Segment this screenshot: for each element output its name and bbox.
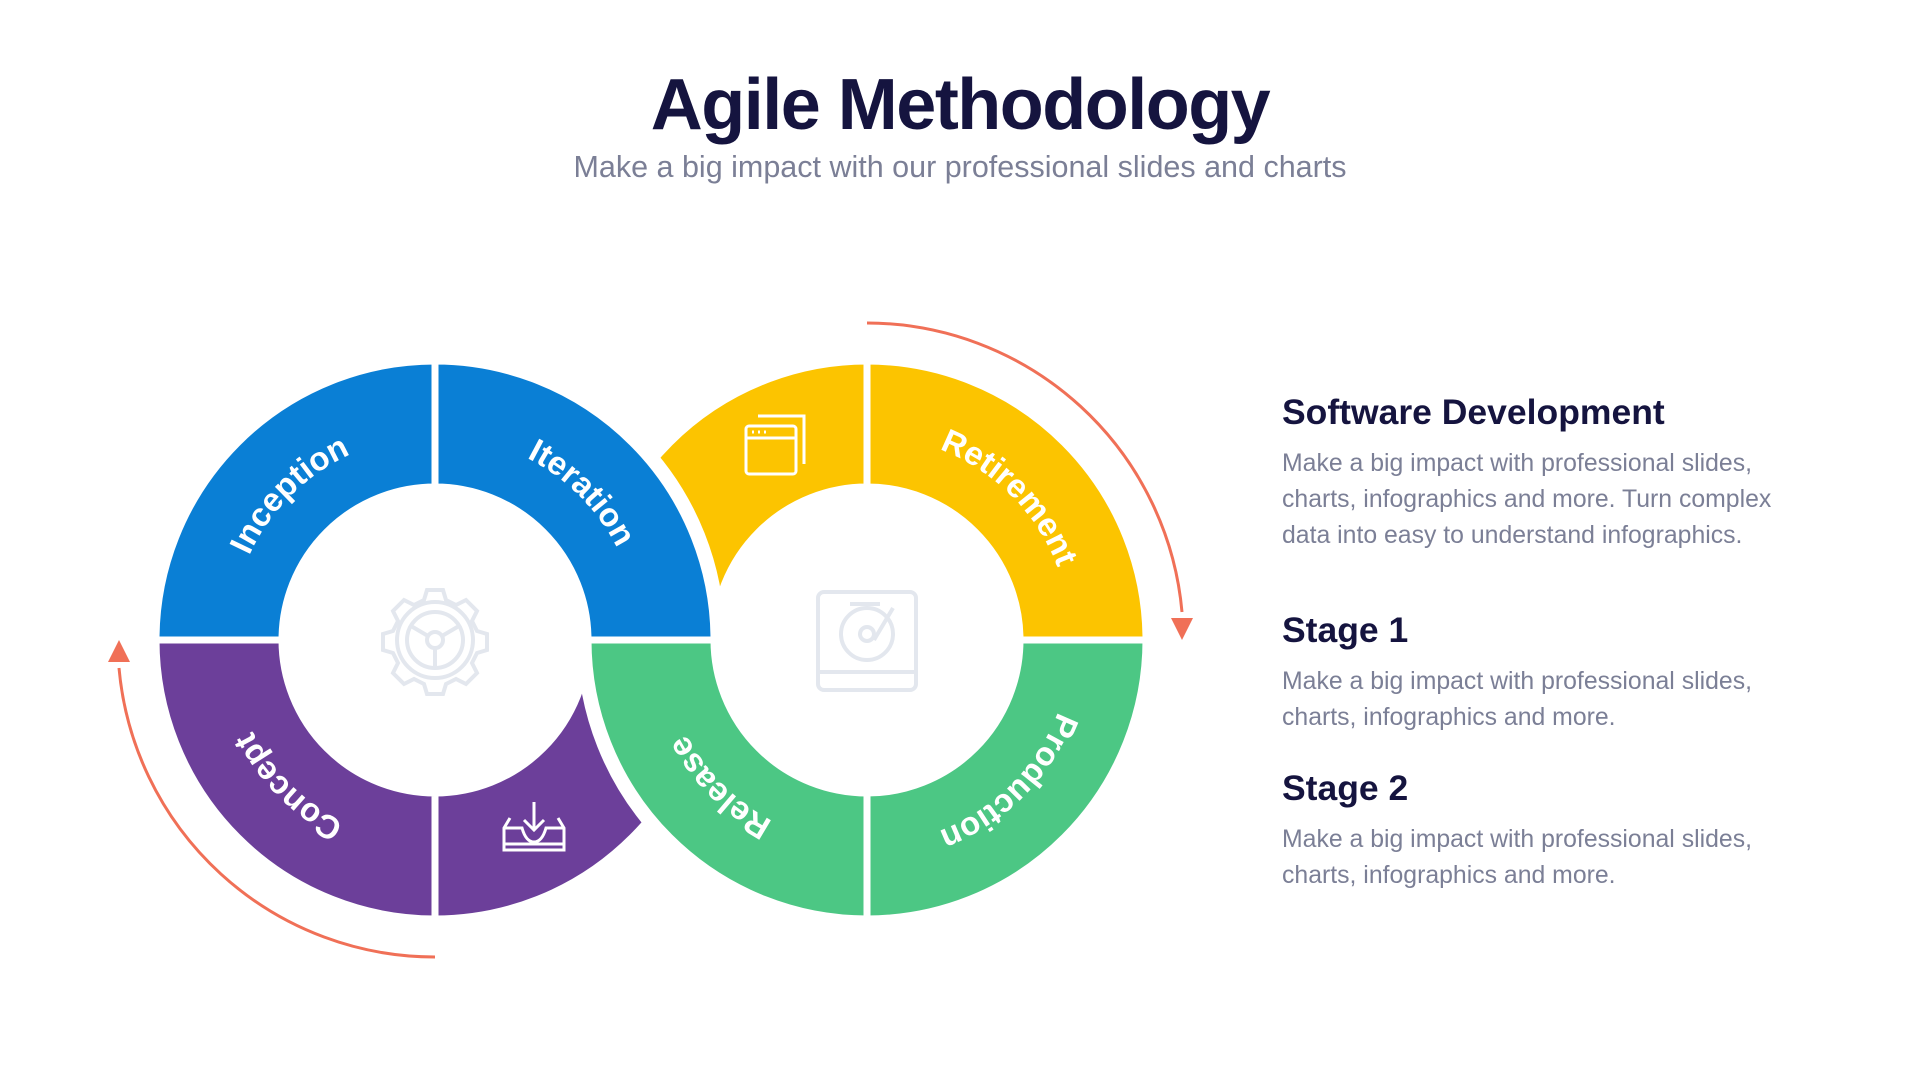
text block: stage 1: charts, infographics and more. <box>1282 704 1616 731</box>
subtitle: Make a big impact with our professional slides and charts <box>573 150 1347 184</box>
segment labels: Inception <box>230 441 349 554</box>
segment labels: Concept <box>235 731 340 839</box>
text block: software development <box>1282 392 1771 549</box>
text block: stage 2: Stage 2 <box>1282 768 1408 808</box>
segment: Production <box>867 640 1146 919</box>
text block: software development: data into easy to understand infographics. <box>1282 522 1742 549</box>
text block: software development: Make a big impact with professional slides, <box>1282 450 1752 477</box>
text block: stage 1: Make a big impact with professional slides, <box>1282 668 1752 695</box>
text block: stage 1: Stage 1 <box>1282 610 1408 650</box>
segment: Concept <box>156 640 435 919</box>
title: Agile Methodology <box>651 65 1269 145</box>
segment labels: Production <box>940 714 1078 846</box>
segment: Inception <box>156 361 435 640</box>
segment labels: Release <box>674 737 771 840</box>
segment: purple lower right <box>435 640 714 919</box>
segment labels: Retirement <box>941 429 1076 568</box>
icon: disk drive <box>818 592 916 690</box>
segment labels: Iteration <box>528 438 630 546</box>
segment: Retirement <box>867 361 1146 640</box>
text block: software development: charts, infographics and more. Turn complex <box>1282 486 1771 513</box>
icon: gear <box>383 590 487 694</box>
icon: inbox download <box>504 802 564 850</box>
segment labels <box>230 429 1078 846</box>
text block: stage 2 <box>1282 768 1752 889</box>
text block: stage 1 <box>1282 610 1752 731</box>
text block: stage 2: charts, infographics and more. <box>1282 862 1616 889</box>
icon: windows <box>746 416 804 474</box>
segment: yellow upper left <box>588 361 867 640</box>
arrow: right clockwise <box>867 323 1193 640</box>
segment: Iteration <box>435 361 714 640</box>
text block: stage 2: Make a big impact with professional slides, <box>1282 826 1752 853</box>
text block: software development: Software Development <box>1282 392 1665 432</box>
segment: Release <box>588 640 867 919</box>
arrow: left clockwise <box>108 640 435 957</box>
